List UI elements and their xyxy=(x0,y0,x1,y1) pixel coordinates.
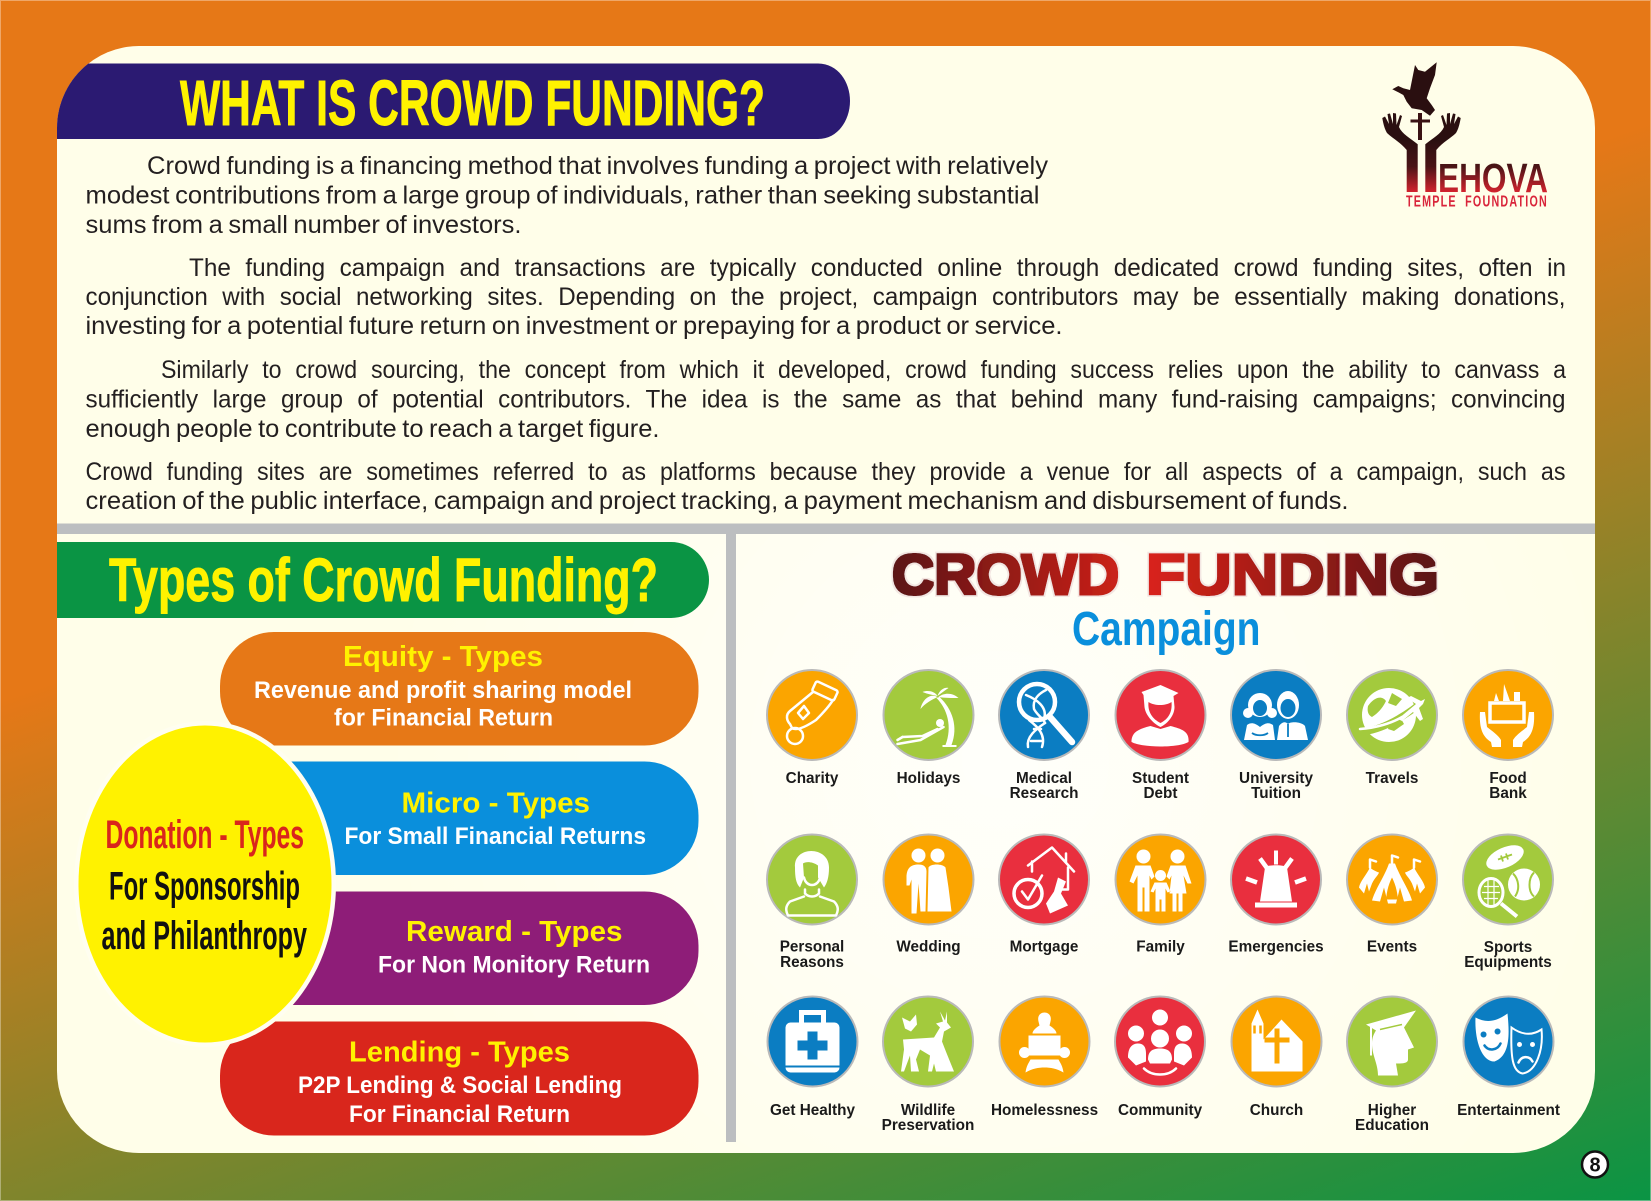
panel: lending types xyxy=(220,1022,698,1136)
heading: what is crowd funding xyxy=(57,64,850,139)
panel: donation types ellipse xyxy=(74,721,336,1047)
campaign item: entertainment xyxy=(1457,996,1560,1119)
campaign item: wedding: Wedding xyxy=(896,938,961,956)
campaign item: wildlife preservation: Wildlife xyxy=(901,1102,955,1119)
campaign item: university tuition: Tuition xyxy=(1251,785,1301,802)
campaign item: mortgage xyxy=(999,834,1089,956)
heading: crowd funding: FUNDING xyxy=(1146,543,1439,607)
heading: campaign: Campaign xyxy=(1072,603,1260,656)
text block: intro paragraph: Crowd funding is a financing method that involves funding a project with relatively xyxy=(147,152,1049,180)
campaign item: holidays xyxy=(884,670,974,787)
campaign item: mortgage: Mortgage xyxy=(1010,938,1078,956)
campaign item: homelessness xyxy=(991,996,1098,1119)
panel: micro types: Micro - Types xyxy=(402,788,590,820)
logo tagline: TEMPLE FOUNDATION xyxy=(1406,194,1548,210)
text block: campaign paragraph: conjunction with social networking sites. Depending on the project, campaign contributors may be essentially making donations, xyxy=(86,283,1566,311)
campaign item: charity: Charity xyxy=(786,770,839,787)
text block: intro paragraph xyxy=(86,152,1049,239)
campaign item: family xyxy=(1116,834,1206,956)
page number badge xyxy=(1582,1152,1608,1178)
campaign item: get healthy: Get Healthy xyxy=(770,1102,855,1119)
heading: types of crowd funding: Types of Crowd Funding? xyxy=(109,546,658,614)
campaign item: events xyxy=(1347,834,1437,956)
panel: donation types ellipse: and Philanthropy xyxy=(102,914,307,958)
panel: reward types xyxy=(220,892,698,1005)
campaign item: wildlife preservation: Preservation xyxy=(882,1117,974,1134)
text block: campaign paragraph xyxy=(86,254,1566,340)
campaign item: medical research: Research xyxy=(1010,785,1078,802)
campaign item: travels: Travels xyxy=(1366,770,1418,787)
icon: cross xyxy=(1410,113,1430,140)
heading: types of crowd funding xyxy=(57,542,709,618)
heading: crowd funding xyxy=(892,543,1439,607)
campaign item: emergencies: Emergencies xyxy=(1228,938,1324,956)
campaign item: church: Church xyxy=(1250,1102,1303,1119)
campaign item: food bank: Food xyxy=(1489,770,1527,787)
panel: micro types xyxy=(220,762,698,875)
text block: campaign paragraph: The funding campaign and transactions are typically conducted online through dedicated crowd funding sites, often in xyxy=(189,254,1566,282)
text block: crowd sourcing paragraph: enough people to contribute to reach a target figure. xyxy=(86,415,660,443)
campaign item: community: Community xyxy=(1118,1102,1203,1119)
page number badge: 8 xyxy=(1589,1154,1601,1176)
panel: equity types: Equity - Types xyxy=(343,641,543,673)
icon: left hand xyxy=(1382,113,1418,192)
campaign item: events: Events xyxy=(1367,938,1417,956)
campaign item: personal reasons: Reasons xyxy=(780,954,844,971)
campaign item: medical research xyxy=(999,670,1089,802)
text block: platforms paragraph xyxy=(86,458,1566,515)
panel: lending types: P2P Lending & Social Lending xyxy=(298,1072,622,1099)
campaign item: medical research: Medical xyxy=(1016,770,1072,787)
text block: platforms paragraph: Crowd funding sites are sometimes referred to as platforms because they provide a venue for all aspects of a campaign, such as xyxy=(86,458,1566,486)
logo wordmark: EHOVA xyxy=(1438,155,1548,201)
heading: crowd funding: CROWD xyxy=(892,543,1119,607)
icon: right hand xyxy=(1425,113,1461,192)
campaign item: family: Family xyxy=(1136,938,1185,956)
icon: dove xyxy=(1392,62,1437,116)
text block: crowd sourcing paragraph xyxy=(86,356,1566,443)
text block: intro paragraph: sums from a small number of investors. xyxy=(86,211,522,239)
campaign item: wedding xyxy=(884,834,974,956)
campaign item: charity xyxy=(767,670,857,787)
text block: crowd sourcing paragraph: Similarly to crowd sourcing, the concept from which it developed, crowd funding success relies upon the ability to canvass a xyxy=(161,356,1566,384)
campaign item: travels xyxy=(1347,670,1437,787)
campaign item: student debt: Debt xyxy=(1144,785,1178,802)
campaign item: get healthy xyxy=(768,996,858,1119)
campaign item: food bank xyxy=(1463,670,1553,802)
heading: what is crowd funding: WHAT IS CROWD FUNDING? xyxy=(180,67,765,139)
campaign item: student debt: Student xyxy=(1132,770,1189,787)
panel: micro types: For Small Financial Returns xyxy=(344,823,646,850)
campaign item: sports equipments xyxy=(1463,834,1553,971)
campaign item: personal reasons xyxy=(767,834,857,971)
panel: equity types: for Financial Return xyxy=(334,704,553,732)
campaign item: community xyxy=(1115,996,1205,1119)
panel: equity types xyxy=(220,632,698,746)
campaign item: wildlife preservation xyxy=(882,996,974,1134)
campaign item: university tuition xyxy=(1231,670,1321,802)
campaign item: university tuition: University xyxy=(1239,770,1313,787)
campaign item: sports equipments: Equipments xyxy=(1464,954,1552,971)
campaign item: homelessness: Homelessness xyxy=(991,1102,1098,1119)
campaign item: church xyxy=(1232,996,1322,1119)
campaign item: emergencies xyxy=(1228,834,1324,956)
text block: crowd sourcing paragraph: sufficiently large group of potential contributors. The idea is the same as that behind many fund-raising campaigns; convincing xyxy=(86,386,1566,414)
panel: equity types: Revenue and profit sharing model xyxy=(254,677,632,704)
campaign item: higher education: Higher xyxy=(1368,1102,1416,1119)
panel: donation types ellipse: For Sponsorship xyxy=(109,864,300,908)
text block: campaign paragraph: investing for a potential future return on investment or prepaying for a product or service. xyxy=(86,312,1062,340)
campaign item: sports equipments: Sports xyxy=(1484,939,1532,956)
text block: platforms paragraph: creation of the public interface, campaign and project tracking, a payment mechanism and disbursement of funds. xyxy=(86,487,1348,515)
panel: lending types: For Financial Return xyxy=(349,1101,570,1128)
campaign item: holidays: Holidays xyxy=(897,770,960,787)
campaign item: entertainment: Entertainment xyxy=(1457,1102,1560,1119)
panel: donation types ellipse: Donation - Types xyxy=(106,813,304,857)
panel: reward types: For Non Monitory Return xyxy=(378,952,650,978)
panel: reward types: Reward - Types xyxy=(406,916,622,948)
panel: lending types: Lending - Types xyxy=(349,1036,570,1068)
logo: Jehova Temple Foundation xyxy=(1382,62,1548,210)
campaign item: personal reasons: Personal xyxy=(780,938,844,956)
campaign item: higher education: Education xyxy=(1355,1117,1429,1134)
campaign item: food bank: Bank xyxy=(1489,785,1527,802)
soft highlight on card xyxy=(57,534,1595,1153)
campaign item: higher education xyxy=(1347,996,1437,1134)
text block: intro paragraph: modest contributions from a large group of individuals, rather than seeking substantial xyxy=(86,182,1040,210)
campaign item: student debt xyxy=(1116,670,1206,802)
